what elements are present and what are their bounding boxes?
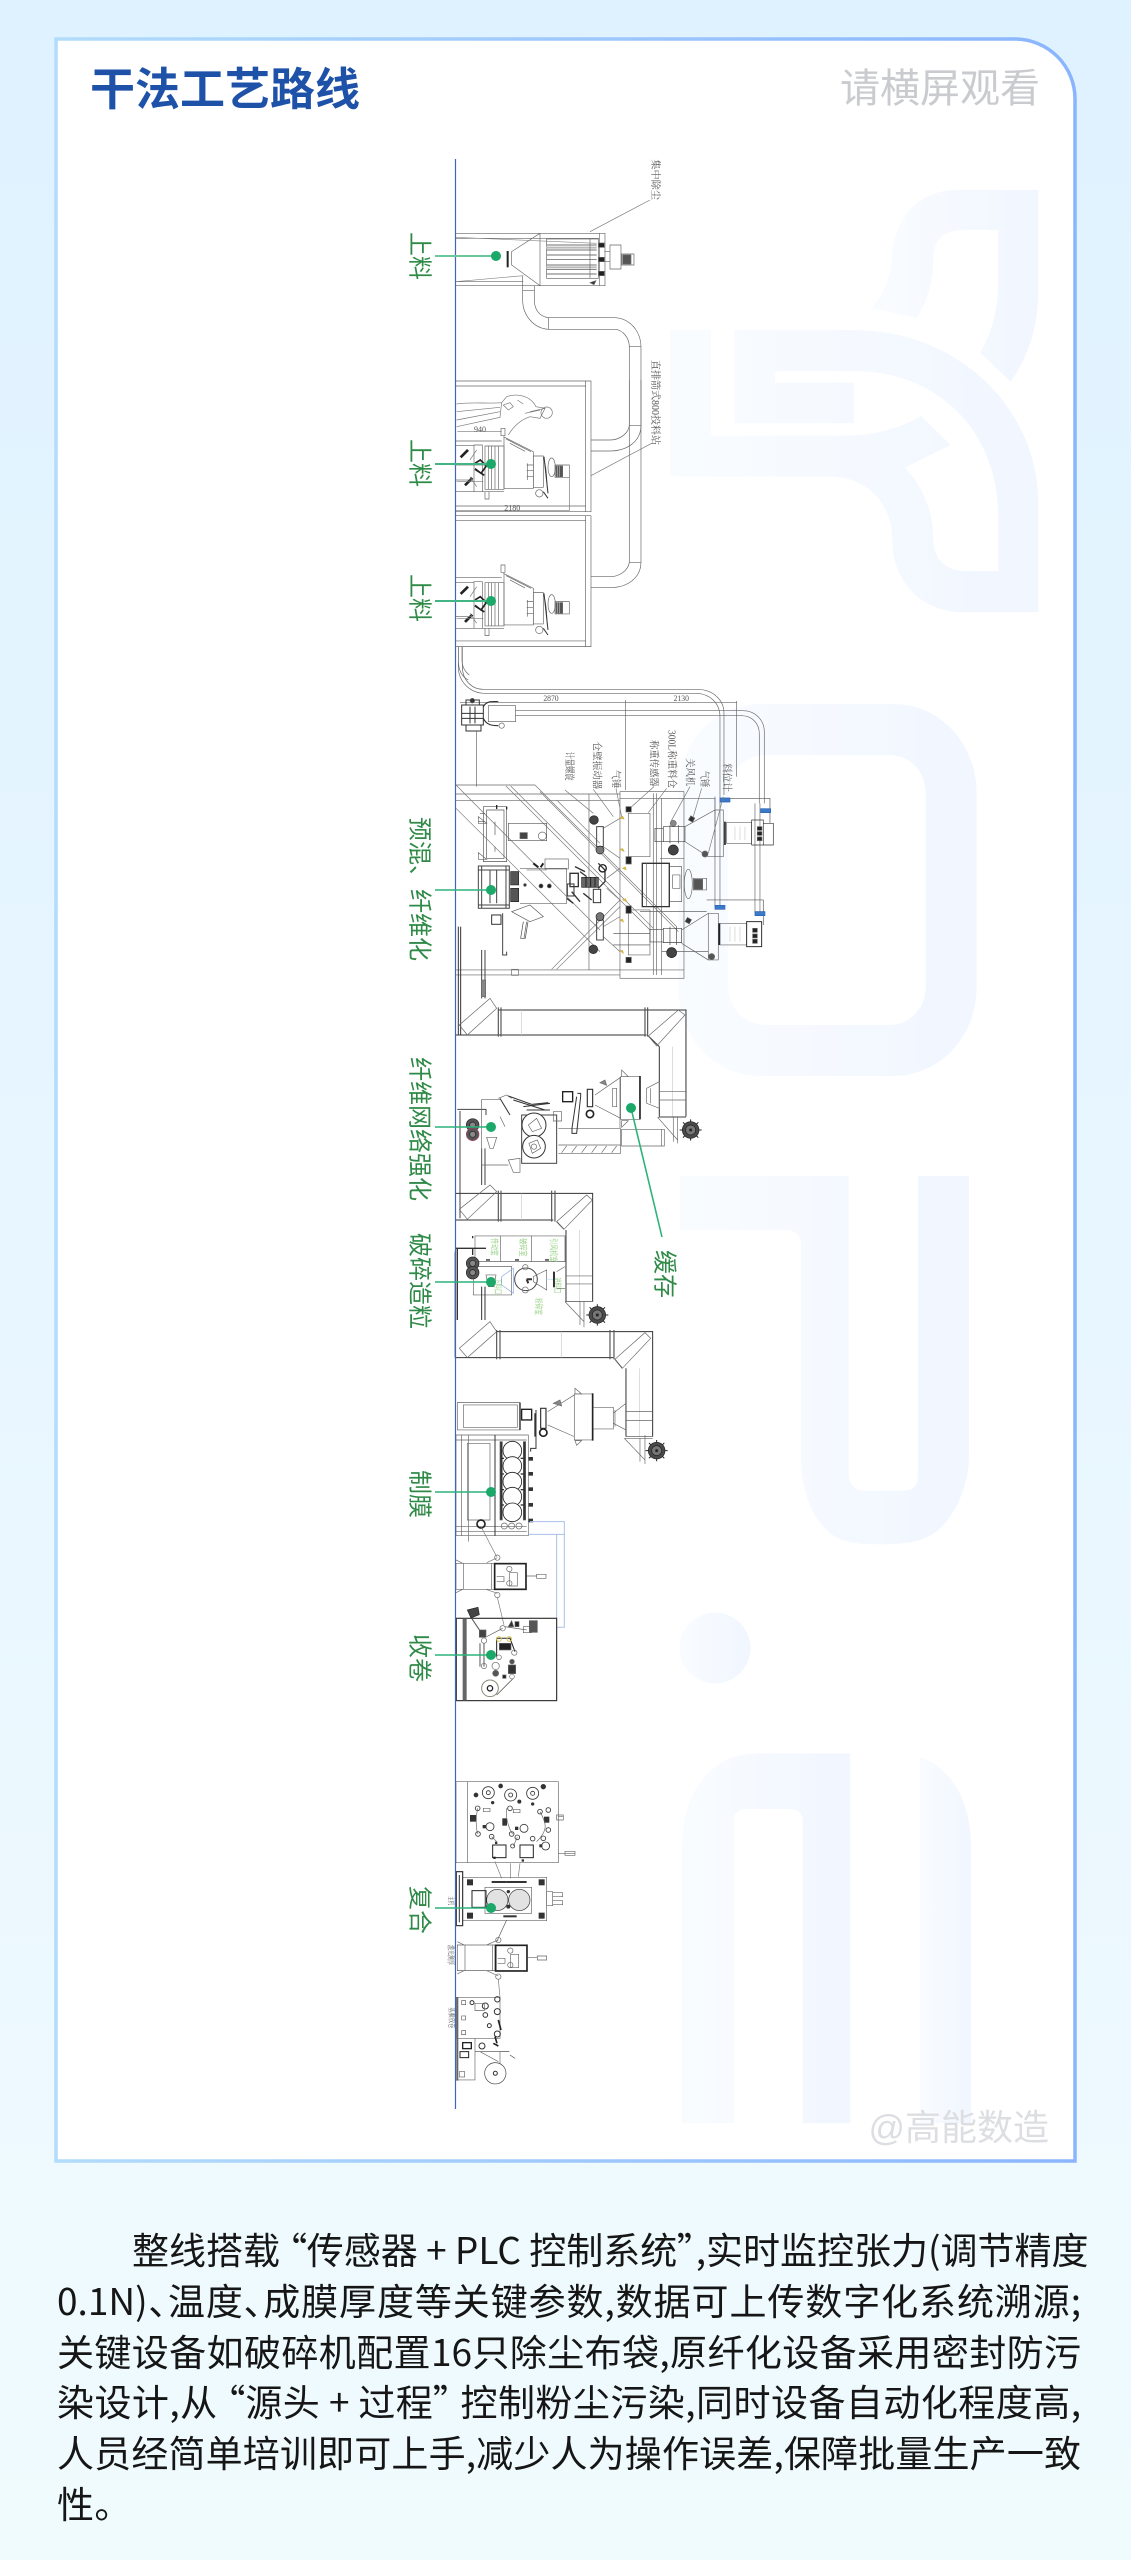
label: 上料 3: 上料 xyxy=(406,574,432,622)
text block: description paragraph xyxy=(57,2221,1089,2529)
diagram: labels for sensors in premix section: 气锤 xyxy=(698,771,710,787)
diagram: ducts, fibre-network and crushing sections: 进料口 xyxy=(552,1277,563,1293)
diagram: ducts, fibre-network and crushing sections: 破碎室 xyxy=(518,1238,529,1257)
label: 复合: 复合 xyxy=(406,1886,432,1934)
source watermark: @高能数造 xyxy=(868,2107,1049,2148)
label: 破碎造粒 xyxy=(406,1233,496,1329)
text block: description paragraph: 人员经简单培训即可上手,减少人为操作误差,保障批量生产一致 xyxy=(57,2424,1081,2478)
label: 制膜 xyxy=(406,1470,496,1518)
diagram: ducts, fibre-network and crushing sections: 传动室 xyxy=(490,1238,501,1256)
rotate-screen hint: 请横屏观看 xyxy=(840,67,1040,111)
label: 上料 1 xyxy=(406,232,501,280)
diagram: feed stations: 940 xyxy=(474,425,486,434)
watermark logo xyxy=(670,190,1038,2123)
diagram: ducts, fibre-network and crushing sections: 引风机室 xyxy=(549,1238,560,1263)
diagram: labels for sensors in premix section: 气锤 xyxy=(610,770,622,788)
label: 破碎造粒: 破碎造粒 xyxy=(406,1233,432,1329)
diagram: labels for sensors in premix section: 计量螺旋 xyxy=(563,752,576,781)
diagram: lamination line: 基膜放卷 xyxy=(447,2007,456,2029)
diagram: labels for sensors in premix section: 称重传感器 xyxy=(648,740,661,787)
label: 复合 xyxy=(406,1886,496,1934)
text block: description paragraph: 染设计,从 “源头 + 过程” 控制粉尘污染,同时设备自动化程度高, xyxy=(57,2373,1081,2427)
label: 上料 3 xyxy=(406,574,496,622)
diagram: feed stations: 2180 xyxy=(504,504,520,513)
baseline: vertical reference line xyxy=(454,159,456,2109)
text block: description paragraph: 整线搭载 “传感器 + PLC 控制系统”,实时监控张力(调节精度 xyxy=(132,2221,1089,2275)
label: 上料 2: 上料 xyxy=(406,439,432,487)
diagram: dust collector and duct: 集中除尘 xyxy=(649,159,662,200)
title: 干法工艺路线 xyxy=(90,64,360,115)
diagram: premix and fibrillation section: 2130 xyxy=(674,694,689,703)
diagram: film forming and winding xyxy=(456,1410,564,1701)
diagram: feed stations xyxy=(455,380,652,680)
label: 收卷 xyxy=(406,1634,496,1682)
diagram: dust collector and duct: 直排箭式800投料站 xyxy=(649,360,662,445)
label: 缓存 xyxy=(626,1103,678,1298)
diagram: labels for sensors in premix section: 料位计 xyxy=(720,763,733,792)
label: 预混、纤维化 xyxy=(406,817,496,961)
text block: description paragraph: 0.1N)、温度、成膜厚度等关键参数,数据可上传数字化系统溯源; xyxy=(57,2272,1081,2326)
diagram: lamination line: 激光测厚 xyxy=(446,1945,455,1965)
diagram: ducts, fibre-network and crushing sections: 下料口 xyxy=(493,1278,504,1294)
label: 上料 1: 上料 xyxy=(406,232,432,280)
label: 预混、纤维化: 预混、纤维化 xyxy=(406,817,432,961)
diagram: dust collector and duct xyxy=(455,159,662,445)
diagram: lamination line xyxy=(446,1782,575,2084)
panel: white content card xyxy=(56,39,1075,2161)
label: 缓存: 缓存 xyxy=(650,1250,678,1298)
label: 上料 2 xyxy=(406,439,496,487)
label: 纤维网络强化 xyxy=(406,1057,496,1201)
diagram: premix and fibrillation section xyxy=(456,647,773,978)
diagram: labels for sensors in premix section: 300L称重料仓 xyxy=(665,730,678,788)
diagram: lamination line: 主机 xyxy=(446,1896,455,1906)
diagram: labels for sensors in premix section: 仓壁振动器 xyxy=(590,742,603,789)
diagram: ducts, fibre-network and crushing sections: 粉碎室 xyxy=(534,1298,545,1315)
label: 制膜: 制膜 xyxy=(406,1470,432,1518)
diagram: labels for sensors in premix section: 关风机 xyxy=(684,758,697,786)
label: 收卷: 收卷 xyxy=(406,1634,432,1682)
text block: description paragraph: 性。 xyxy=(57,2475,112,2529)
diagram: premix and fibrillation section: 2870 xyxy=(543,694,559,703)
text block: description paragraph: 关键设备如破碎机配置16只除尘布袋,原纤化设备采用密封防污 xyxy=(57,2323,1081,2377)
label: 纤维网络强化: 纤维网络强化 xyxy=(406,1057,432,1201)
diagram: ducts, fibre-network and crushing sections xyxy=(455,927,702,1464)
diagram: labels for sensors in premix section xyxy=(563,730,733,853)
